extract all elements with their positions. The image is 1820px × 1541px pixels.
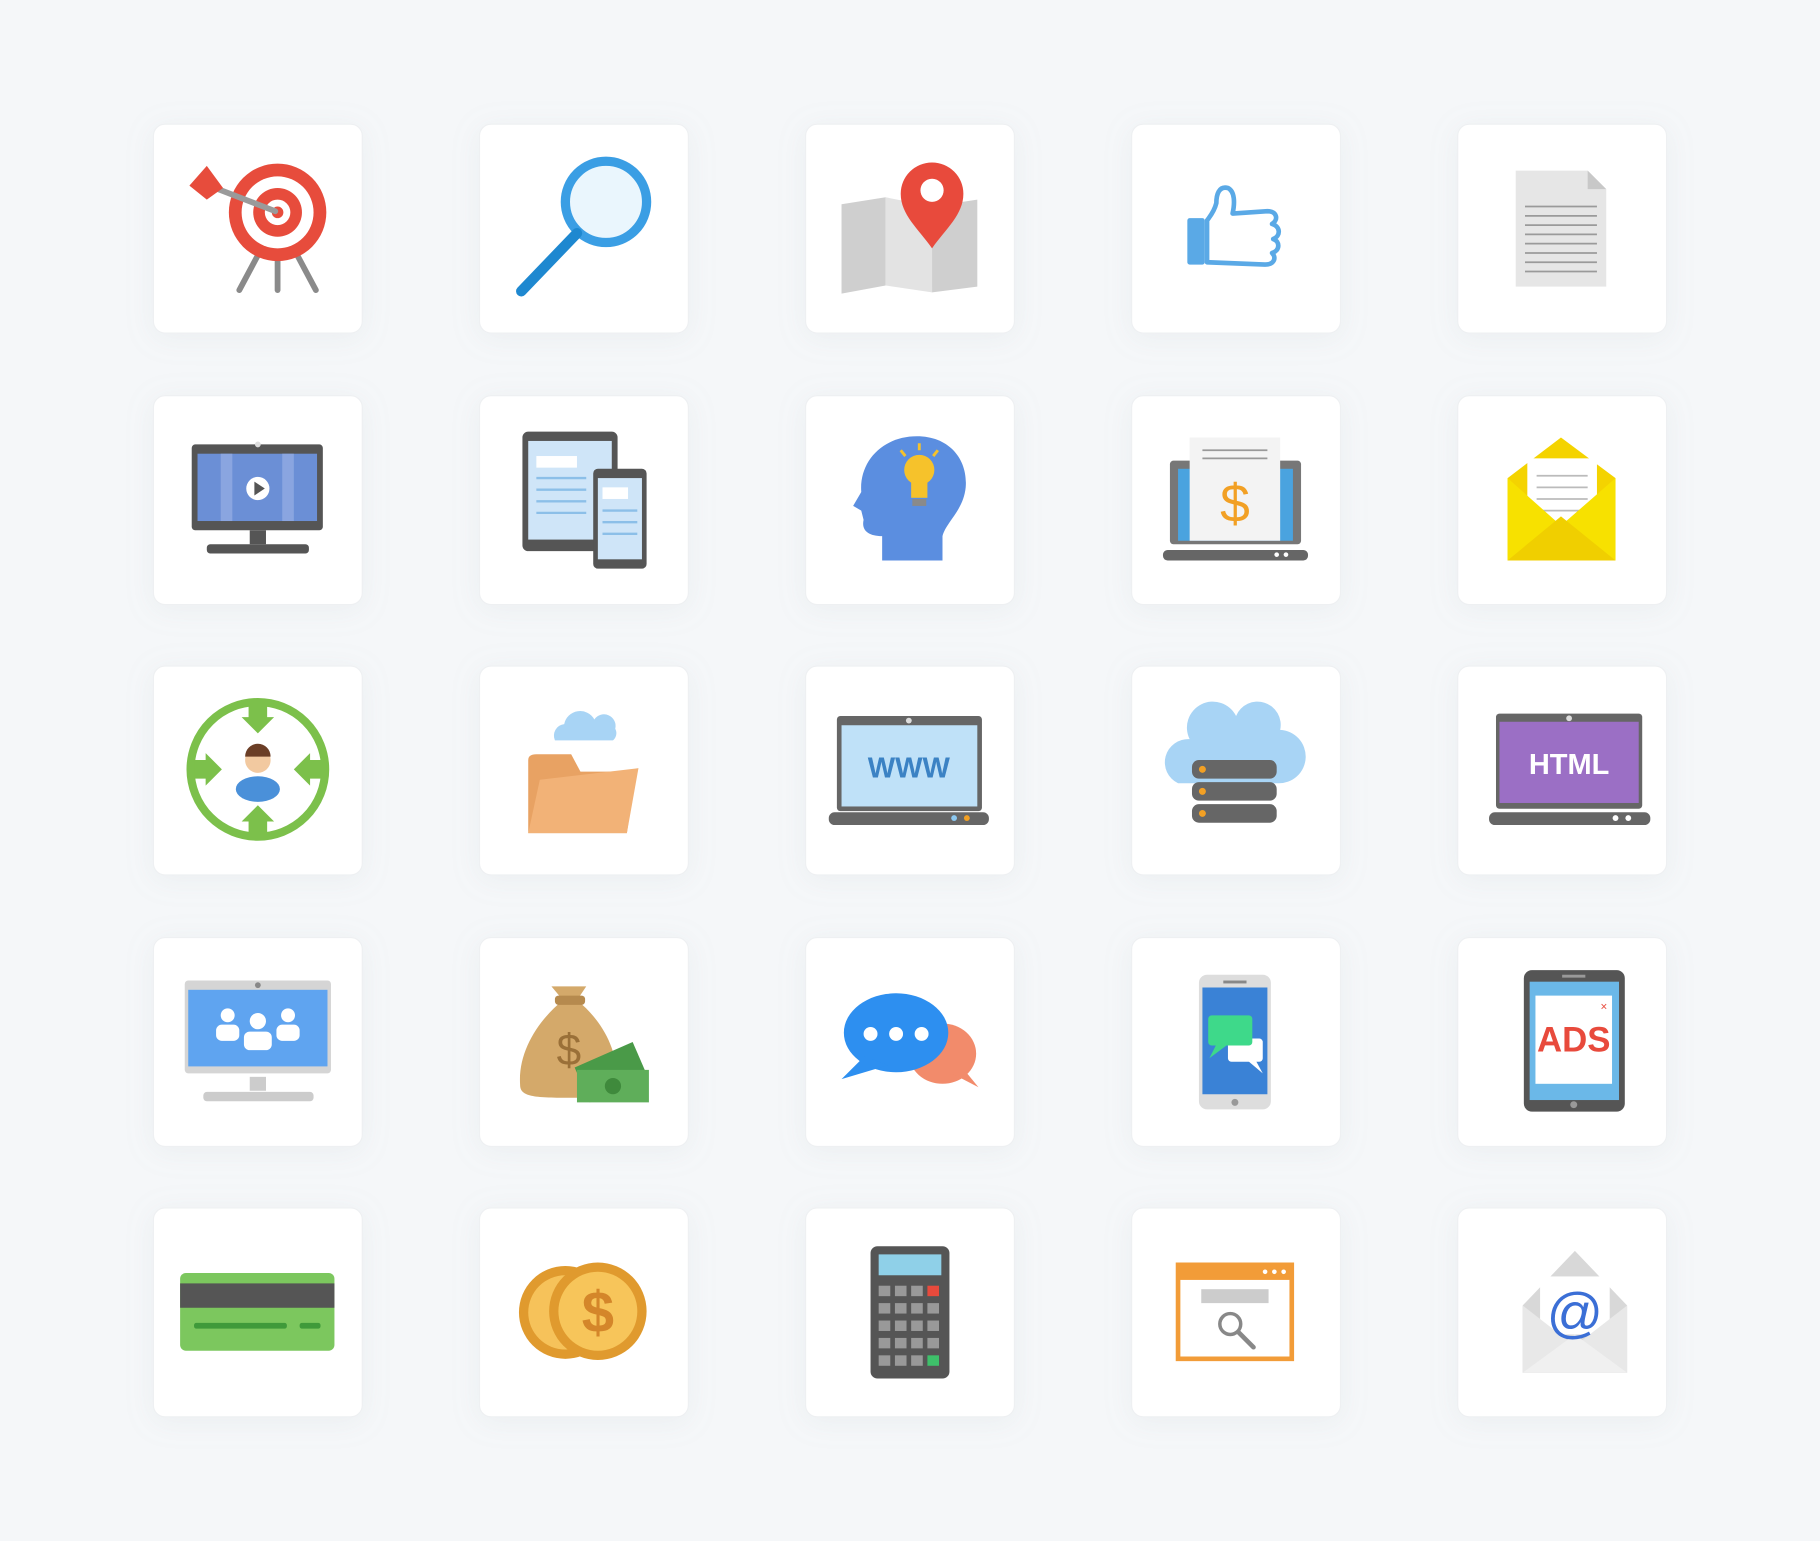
icon: magnifier: [521, 161, 647, 291]
card grid: [153, 124, 1667, 1417]
icon: email at: @: [1547, 1282, 1603, 1344]
icon: calculator: [871, 1246, 949, 1379]
icon: browser search: [1178, 1265, 1292, 1359]
icon: laptop www: [829, 716, 989, 825]
icon: email at: [1523, 1251, 1627, 1373]
icon: chat bubbles: [842, 993, 978, 1087]
icon: tablet ads: ×: [1601, 1001, 1607, 1014]
icon: monitor group: [185, 981, 331, 1101]
icon: coins: [519, 1263, 647, 1360]
icon: laptop invoice: $: [1220, 475, 1250, 534]
icon: document: [1516, 171, 1606, 287]
icon: tablet ads: ADS: [1537, 1020, 1610, 1059]
icon: laptop html: [1489, 714, 1650, 825]
icon: money bag: $: [557, 1026, 581, 1075]
icon: laptop www: WWW: [868, 752, 951, 784]
icon: tablet ads: [1524, 970, 1625, 1112]
icon: coins: $: [582, 1280, 614, 1345]
icon: head with lightbulb: [853, 436, 966, 560]
icon: money bag: [520, 986, 649, 1102]
icon: laptop invoice: [1163, 437, 1308, 560]
icon: phone chat: [1199, 975, 1271, 1109]
icon: map pin: [842, 162, 977, 294]
icon: cloud server: [1165, 702, 1306, 823]
icon: target: [189, 164, 326, 290]
icon: video monitor: [192, 442, 323, 554]
icon: credit card: [180, 1273, 334, 1351]
icon: laptop html: HTML: [1529, 749, 1609, 781]
icon: target person: [191, 702, 325, 837]
icon: thumbs up: [1187, 188, 1279, 265]
icon: cloud folder: [528, 711, 638, 833]
icon: tablet and phone: [522, 432, 647, 569]
icon: envelope: [1508, 437, 1616, 560]
